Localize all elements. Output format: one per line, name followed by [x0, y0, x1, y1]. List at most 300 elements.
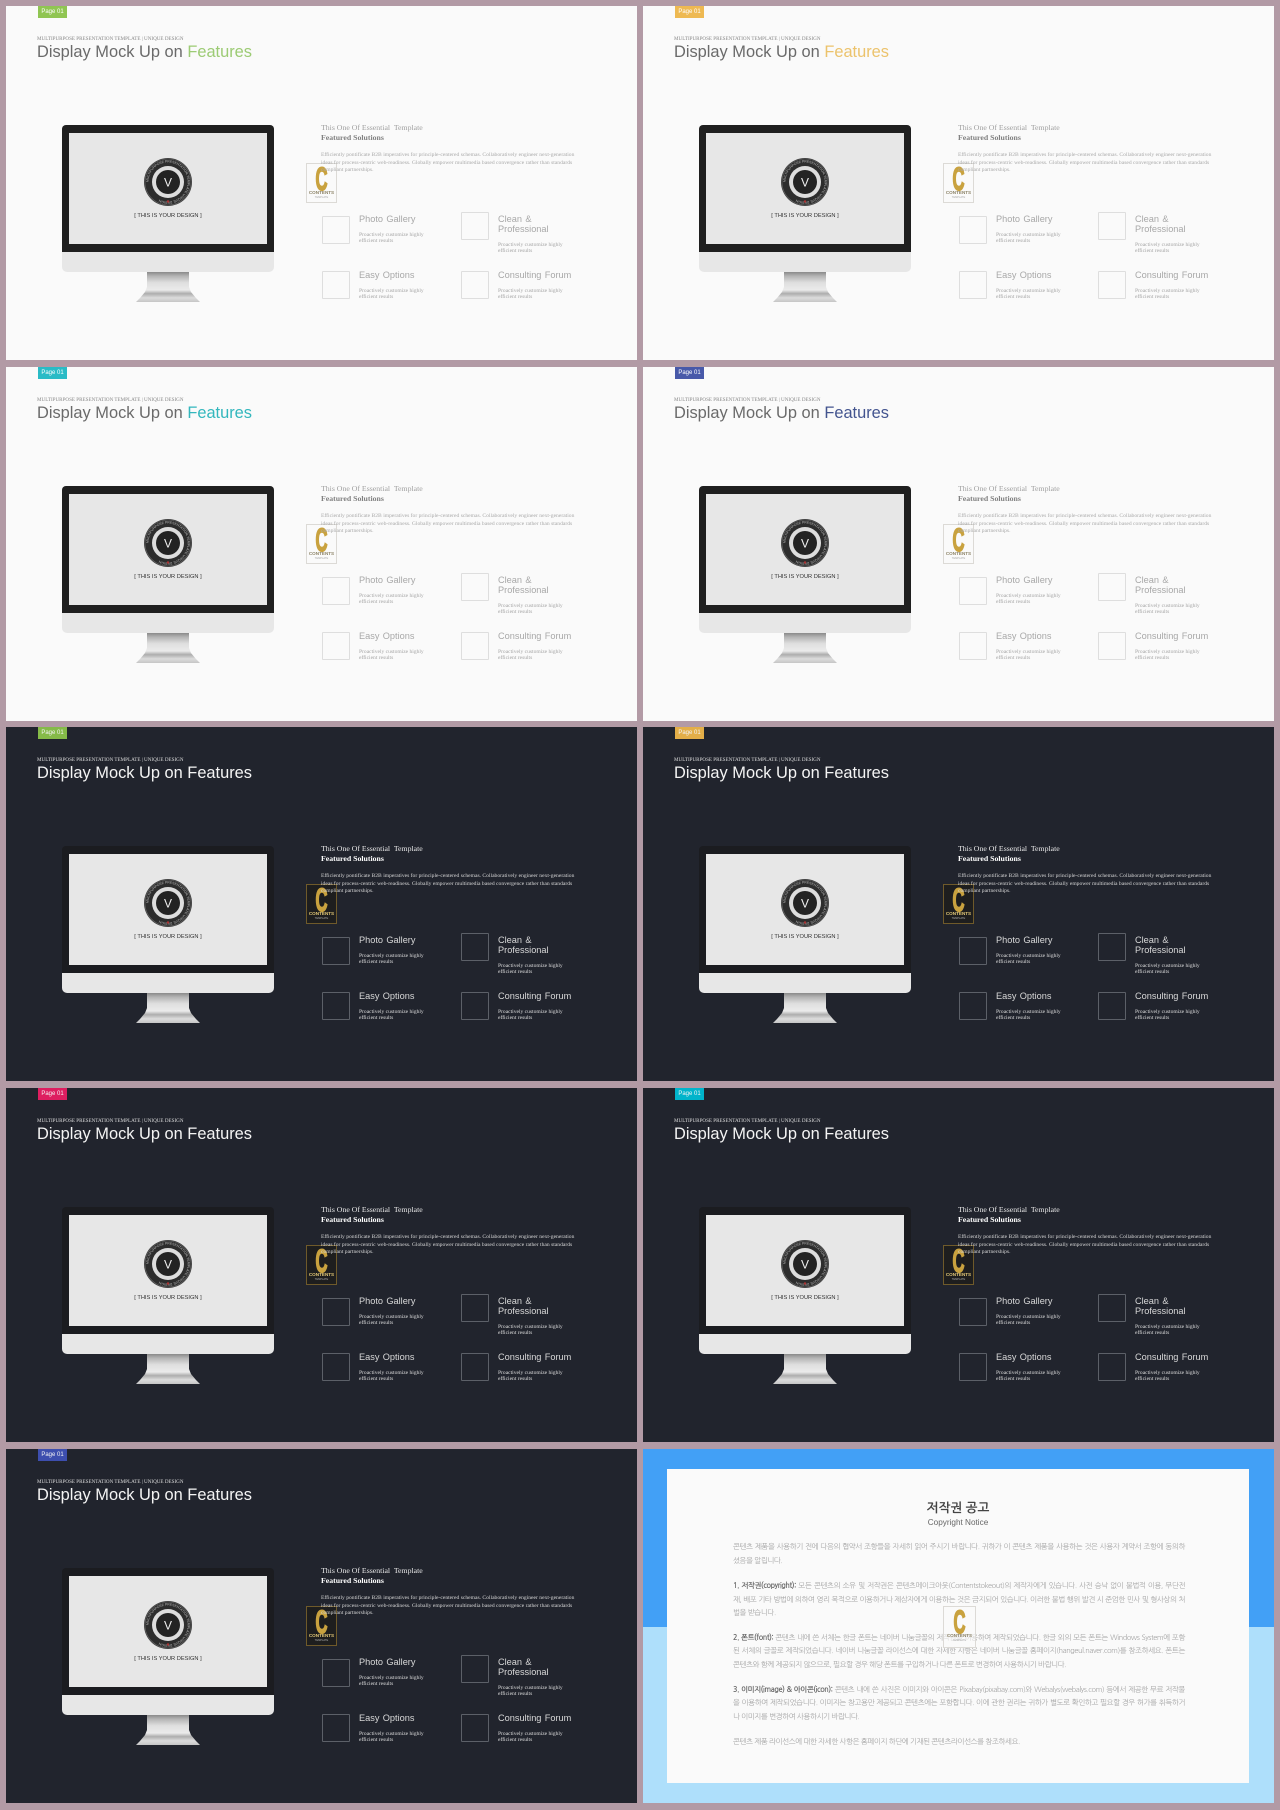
paragraph: ideas for process-centric web-readiness. Globally empower multimedia based convergence rather than standards [958, 521, 1209, 527]
watermark [306, 163, 337, 203]
intro paragraph: 셨음을 알립니다. [733, 1558, 782, 1564]
feature: photo gallery [959, 214, 1061, 244]
paragraph: Efficiently pontificate B2B imperatives for principle-centered schemas. Collaboratively engineer next-generation [321, 513, 574, 519]
paragraph: compliant partnerships. [958, 528, 1011, 534]
feature: photo gallery: Proactively customize highly [996, 1314, 1061, 1320]
paragraph: ideas for process-centric web-readiness. Globally empower multimedia based convergence rather than standards [321, 1603, 572, 1609]
feature: easy options: Easy Options [359, 1352, 414, 1362]
title: Display Mock Up on Features [37, 43, 252, 61]
feature: photo gallery: Proactively customize highly [996, 232, 1061, 238]
subtitle: MULTIPURPOSE PRESENTATION TEMPLATE | UNIQUE DESIGN [674, 757, 820, 763]
feature: easy options: Easy Options [996, 990, 1051, 1000]
paragraph: Efficiently pontificate B2B imperatives for principle-centered schemas. Collaboratively engineer next-generation [958, 513, 1211, 519]
feature: clean and professional: efficient results [1135, 969, 1169, 975]
paragraph [958, 513, 1212, 534]
feature: clean and professional: Clean & [1135, 934, 1168, 944]
heading: This One Of Essential Template [958, 1204, 1060, 1214]
feature: consulting forum: Proactively customize highly [498, 648, 563, 654]
title: Display Mock Up on Features [674, 404, 889, 422]
feature: photo gallery: Proactively customize highly [996, 592, 1061, 598]
feature: easy options: efficient results [996, 1376, 1030, 1382]
feature: consulting forum: Consulting Forum [498, 1352, 571, 1362]
heading: Featured Solutions [958, 1215, 1021, 1224]
feature: photo gallery: Photo Gallery [359, 574, 415, 584]
heading: This One Of Essential Template [321, 844, 423, 852]
feature: clean and professional: efficient results [1135, 1330, 1169, 1336]
feature: clean and professional: efficient results [498, 1330, 532, 1336]
intro paragraph: 콘텐츠 제품을 사용하기 전에 다음의 협약서 조항들을 자세히 읽어 주시기 바랍니다. 귀하가 이 콘텐츠 제품을 사용하는 것은 사용자 계약서 조항에 동의하 [733, 1544, 1185, 1551]
feature: consulting forum: Consulting Forum [498, 1712, 571, 1722]
feature: clean and professional: Proactively customize highly [498, 1324, 563, 1330]
feature: clean and professional [1098, 212, 1200, 254]
feature: consulting forum [461, 990, 571, 1021]
heading [321, 484, 423, 503]
badge logo: V [164, 896, 172, 910]
section 3: image and icon: 을 이용하여 제작되었습니다. 이미지는 참고용만 제공되고 콘텐츠에는 포함합니다. 이에 관한 권리는 귀하가 별도로 확인하고 필요할 경우 허가를 취득하거 [733, 1700, 1185, 1707]
feature: clean and professional [461, 573, 563, 615]
feature: easy options [322, 630, 424, 661]
paragraph: ideas for process-centric web-readiness. Globally empower multimedia based convergence rather than standards [321, 1242, 572, 1248]
monitor mockup [699, 1207, 911, 1384]
screen caption: [ THIS IS YOUR DESIGN ] [134, 934, 202, 940]
watermark: TEMPLATE [315, 196, 328, 199]
paragraph: compliant partnerships. [321, 167, 374, 173]
feature: photo gallery: Proactively customize highly [359, 592, 424, 598]
page tag [38, 1449, 67, 1461]
heading: This One Of Essential Template [321, 484, 423, 492]
feature: clean and professional: Proactively customize highly [1135, 1324, 1200, 1330]
feature: clean and professional: Professional [1135, 584, 1186, 594]
feature: consulting forum [461, 630, 571, 661]
feature: clean and professional: Professional [1135, 224, 1186, 234]
notice sheet [667, 1469, 1249, 1783]
monitor mockup [62, 1207, 274, 1384]
page tag: Page 01 [678, 730, 701, 736]
feature: clean and professional: Clean & [498, 214, 532, 224]
feature: consulting forum [1098, 270, 1208, 300]
feature: photo gallery: Proactively customize highly [359, 232, 424, 238]
feature: photo gallery [959, 1293, 1084, 1339]
paragraph: compliant partnerships. [958, 167, 1011, 173]
watermark: TEMPLATE [315, 917, 328, 920]
feature: clean and professional: Professional [1135, 1306, 1186, 1316]
feature: clean and professional: Proactively customize highly [1135, 962, 1200, 968]
feature: clean and professional [461, 933, 563, 975]
page tag: Page 01 [678, 1091, 701, 1097]
paragraph: ideas for process-centric web-readiness. Globally empower multimedia based convergence rather than standards [321, 160, 572, 166]
section 2: font: 된 서체의 글꼴로 제작되었습니다. 네이버 나눔글꼴 라이선스에 대한 자세한 사항은 네이버 나눔글꼴 홈페이지(hangeul.naver.com)를 참조하세요. 폰트는 [733, 1648, 1185, 1655]
feature: easy options: efficient results [359, 655, 393, 661]
feature: consulting forum: Proactively customize highly [1135, 1008, 1200, 1014]
badge logo: MULTIPURPOSE PRESENTATION TEMPLATE UNIQUE DESIGN [146, 160, 190, 204]
feature: clean and professional: Professional [498, 944, 549, 954]
feature: clean and professional: Professional [498, 1666, 549, 1676]
feature: clean and professional: efficient results [498, 969, 532, 975]
watermark: TEMPLATE [952, 557, 965, 560]
feature: clean and professional: efficient results [1135, 609, 1169, 615]
paragraph: compliant partnerships. [958, 888, 1011, 894]
feature: clean and professional [461, 1293, 586, 1345]
feature: clean and professional: Proactively customize highly [1135, 602, 1200, 608]
watermark: C [952, 522, 965, 558]
feature: photo gallery: efficient results [996, 599, 1030, 605]
feature: clean and professional: Professional [498, 224, 549, 234]
heading: Featured Solutions [321, 133, 384, 142]
page tag [38, 6, 67, 18]
section 1: copyright [733, 1580, 1185, 1620]
feature: easy options: Easy Options [996, 630, 1051, 640]
feature: easy options [959, 988, 1084, 1034]
watermark: CONTENTS [946, 190, 971, 195]
watermark: TEMPLATE [952, 196, 965, 199]
feature: easy options: Easy Options [996, 270, 1051, 280]
feature: consulting forum: Proactively customize highly [498, 1008, 563, 1014]
page tag [675, 6, 704, 18]
heading: This One Of Essential Template [321, 1566, 423, 1574]
monitor mockup [62, 1568, 274, 1745]
monitor mockup [699, 486, 911, 663]
feature: photo gallery [959, 932, 1084, 978]
section 3: image and icon [733, 1684, 1185, 1724]
feature: easy options [959, 270, 1061, 300]
watermark: C [315, 522, 328, 558]
paragraph [321, 1234, 574, 1257]
feature: consulting forum: Consulting Forum [498, 270, 571, 280]
watermark [306, 1606, 337, 1646]
badge logo: V [801, 896, 809, 910]
feature: consulting forum: Proactively customize highly [498, 1730, 563, 1736]
watermark: CONTENTS [946, 1272, 971, 1277]
feature: clean and professional: Proactively customize highly [498, 962, 563, 968]
watermark: CONTENTS [946, 551, 971, 556]
heading: Featured Solutions [321, 854, 384, 863]
feature: easy options: Proactively customize highly [359, 1370, 424, 1376]
feature: consulting forum: Consulting Forum [1135, 630, 1208, 640]
paragraph [321, 513, 574, 534]
watermark [943, 1245, 974, 1285]
feature: easy options: Proactively customize highly [359, 1730, 424, 1736]
paragraph: compliant partnerships. [321, 1610, 374, 1616]
subtitle: MULTIPURPOSE PRESENTATION TEMPLATE | UNIQUE DESIGN [37, 397, 184, 403]
section 1: copyright: 재, 배포 기타 방법에 의하여 영리 목적으로 이용하거나 제삼자에게 이용하는 것은 금지되어 있습니다. 이러한 불법 행위 발견 시 준엄한 민사 및 형사상의 처 [733, 1596, 1185, 1604]
heading [321, 844, 423, 863]
panel: slide 4 light indigo [643, 367, 1274, 721]
feature: clean and professional: Clean & [1135, 1296, 1168, 1306]
feature: easy options: Proactively customize highly [996, 288, 1061, 294]
feature: photo gallery: efficient results [359, 599, 393, 605]
screen caption: [ THIS IS YOUR DESIGN ] [134, 212, 202, 218]
section 1: copyright: 1. 저작권(copyright): 모든 콘텐츠의 소유 및 저작권은 콘텐츠메이크아웃(Contentstokeout)의 제작자에게 있습니다. 사전 승낙 없이 불법적 이용, 무단전 [733, 1583, 1185, 1590]
badge logo: MULTIPURPOSE PRESENTATION TEMPLATE UNIQUE DESIGN [146, 521, 190, 565]
monitor mockup [62, 846, 274, 1023]
title: Display Mock Up on Features [674, 43, 889, 61]
paragraph: ideas for process-centric web-readiness. Globally empower multimedia based convergence rather than standards [958, 1242, 1209, 1248]
feature: photo gallery: Photo Gallery [996, 574, 1052, 584]
feature: photo gallery: Proactively customize highly [359, 952, 424, 958]
panel: copyright notice [643, 1449, 1274, 1803]
paragraph: ideas for process-centric web-readiness. Globally empower multimedia based convergence rather than standards [958, 160, 1209, 166]
page tag: Page 01 [41, 1091, 64, 1097]
watermark [943, 1606, 976, 1648]
feature: photo gallery [322, 1293, 447, 1339]
feature: easy options: efficient results [359, 1737, 393, 1743]
screen caption: [ THIS IS YOUR DESIGN ] [134, 574, 202, 580]
feature: easy options: Easy Options [359, 630, 414, 640]
paragraph: Efficiently pontificate B2B imperatives for principle-centered schemas. Collaboratively engineer next-generation [958, 1234, 1211, 1240]
watermark: C [315, 161, 328, 197]
watermark: CONTENTS [309, 911, 334, 916]
page tag: Page 01 [678, 370, 701, 376]
section 3: image and icon: 3. 이미지(image) & 아이콘(icon): 콘텐츠 내에 쓴 사진은 이미지와 아이콘은 Pixabay(pixabay.com)와 Webalys(webalys.com) 등에서 제공한 무료 저작물 [733, 1686, 1185, 1694]
paragraph [958, 152, 1212, 173]
watermark: TEMPLATE [953, 1639, 966, 1642]
watermark: TEMPLATE [952, 917, 965, 920]
feature: photo gallery: Photo Gallery [996, 214, 1052, 224]
monitor mockup [699, 125, 911, 302]
feature: photo gallery: Photo Gallery [359, 934, 415, 944]
notice title: 저작권 공고 [927, 1501, 989, 1514]
feature: easy options [322, 270, 424, 300]
feature: consulting forum: efficient results [1135, 655, 1169, 661]
feature: clean and professional: Professional [498, 1306, 549, 1316]
subtitle: MULTIPURPOSE PRESENTATION TEMPLATE | UNIQUE DESIGN [37, 757, 184, 763]
watermark: C [315, 882, 328, 918]
watermark [943, 524, 974, 564]
feature: easy options [959, 630, 1061, 661]
subtitle: MULTIPURPOSE PRESENTATION TEMPLATE | UNIQUE DESIGN [674, 1118, 820, 1124]
badge logo: MULTIPURPOSE PRESENTATION TEMPLATE UNIQUE DESIGN [146, 1242, 190, 1286]
paragraph: Efficiently pontificate B2B imperatives for principle-centered schemas. Collaboratively engineer next-generation [321, 873, 574, 879]
heading: Featured Solutions [321, 494, 384, 503]
feature: photo gallery: Photo Gallery [996, 934, 1052, 944]
feature: consulting forum: Consulting Forum [498, 630, 571, 640]
feature: consulting forum: Consulting Forum [498, 990, 571, 1000]
paragraph [958, 1234, 1211, 1257]
feature: photo gallery [959, 574, 1061, 605]
badge logo: V [801, 176, 809, 190]
title: Display Mock Up on Features [37, 764, 252, 782]
feature: clean and professional: Clean & [1135, 574, 1168, 584]
subtitle: MULTIPURPOSE PRESENTATION TEMPLATE | UNIQUE DESIGN [674, 397, 820, 403]
panel: slide 7 dark pink [6, 1088, 637, 1442]
feature: photo gallery: efficient results [359, 959, 393, 965]
watermark: TEMPLATE [315, 1278, 328, 1281]
section 3: image and icon: 나 이미지를 변경하여 사용하시기 바랍니다. [733, 1714, 859, 1720]
badge logo: MULTIPURPOSE PRESENTATION TEMPLATE UNIQUE DESIGN [783, 160, 827, 204]
feature: clean and professional [1098, 932, 1223, 984]
feature: easy options: Easy Options [359, 270, 414, 280]
feature: clean and professional: Proactively customize highly [498, 242, 563, 248]
title: Display Mock Up on Features [37, 1486, 252, 1504]
heading [321, 1204, 423, 1226]
feature: consulting forum: Proactively customize highly [498, 288, 563, 294]
paragraph: compliant partnerships. [321, 888, 374, 894]
panel: slide 3 light teal [6, 367, 637, 721]
feature: clean and professional: efficient results [498, 248, 532, 254]
feature: clean and professional: Clean & [1135, 214, 1168, 224]
feature: clean and professional: efficient results [1135, 248, 1169, 254]
badge logo: V [801, 536, 809, 550]
heading: Featured Solutions [321, 1215, 384, 1224]
badge logo: V [801, 1258, 809, 1272]
feature: clean and professional: Professional [498, 584, 549, 594]
panel: slide 8 dark cyan [643, 1088, 1274, 1442]
feature: photo gallery: Proactively customize highly [359, 1314, 424, 1320]
page tag: Page 01 [41, 1452, 64, 1458]
feature: consulting forum: Proactively customize highly [1135, 648, 1200, 654]
heading [958, 122, 1060, 142]
screen caption: [ THIS IS YOUR DESIGN ] [771, 574, 839, 580]
heading [958, 484, 1060, 503]
feature: consulting forum: Proactively customize highly [1135, 1370, 1200, 1376]
paragraph: Efficiently pontificate B2B imperatives for principle-centered schemas. Collaboratively engineer next-generation [321, 1234, 574, 1240]
page tag [675, 367, 704, 379]
watermark [306, 884, 337, 924]
watermark: CONTENTS [309, 1272, 334, 1277]
watermark [943, 163, 974, 203]
watermark [306, 524, 337, 564]
title: Display Mock Up on Features [37, 404, 252, 422]
feature: clean and professional [1098, 1293, 1223, 1345]
monitor mockup [699, 846, 911, 1023]
monitor mockup [62, 125, 274, 302]
feature: photo gallery: efficient results [996, 238, 1030, 244]
feature: photo gallery: Proactively customize highly [359, 1674, 424, 1680]
section 2: font [733, 1632, 1185, 1672]
heading: This One Of Essential Template [321, 1204, 423, 1214]
badge logo: MULTIPURPOSE PRESENTATION TEMPLATE UNIQUE DESIGN [146, 1603, 190, 1647]
paragraph: Efficiently pontificate B2B imperatives for principle-centered schemas. Collaboratively engineer next-generation [321, 152, 574, 158]
watermark: TEMPLATE [952, 1278, 965, 1281]
feature: consulting forum [1098, 1349, 1223, 1395]
section 1: copyright: 벌을 받습니다. [733, 1610, 776, 1617]
feature: photo gallery [322, 574, 424, 605]
heading [958, 844, 1060, 865]
feature: photo gallery [322, 1654, 447, 1700]
heading: Featured Solutions [958, 854, 1021, 863]
subtitle: MULTIPURPOSE PRESENTATION TEMPLATE | UNIQUE DESIGN [674, 36, 820, 42]
monitor mockup [62, 486, 274, 663]
feature: easy options [322, 990, 424, 1021]
badge logo: MULTIPURPOSE PRESENTATION TEMPLATE UNIQUE DESIGN [783, 1242, 827, 1286]
paragraph [958, 873, 1211, 896]
paragraph [321, 873, 574, 894]
feature: easy options: efficient results [359, 294, 393, 300]
screen caption: [ THIS IS YOUR DESIGN ] [771, 934, 839, 940]
feature: easy options: Proactively customize highly [996, 648, 1061, 654]
panel: slide 2 light yellow [643, 6, 1274, 360]
watermark: CONTENTS [309, 1633, 334, 1638]
feature: clean and professional: Clean & [498, 574, 532, 584]
heading: This One Of Essential Template [958, 484, 1060, 492]
watermark: CONTENTS [946, 911, 971, 916]
feature: consulting forum: Consulting Forum [1135, 1352, 1208, 1362]
feature: easy options [322, 1710, 447, 1756]
feature: clean and professional: Proactively customize highly [498, 602, 563, 608]
feature: clean and professional: Professional [1135, 944, 1186, 954]
paragraph: compliant partnerships. [321, 1249, 374, 1255]
feature: clean and professional: Proactively customize highly [498, 1684, 563, 1690]
feature: consulting forum: Consulting Forum [1135, 270, 1208, 280]
feature: easy options: efficient results [359, 1015, 393, 1021]
section 2: font: 2. 폰트(font): 콘텐츠 내에 쓴 서체는 한글 폰트는 네이버 나눔글꼴의 저작권을 허용하여 제작되었습니다. 한글 외의 모든 폰트는 Windows System에 포함 [733, 1634, 1185, 1642]
page tag: Page 01 [41, 730, 64, 736]
screen caption: [ THIS IS YOUR DESIGN ] [134, 1294, 202, 1300]
feature: easy options: efficient results [359, 1376, 393, 1382]
heading: Featured Solutions [958, 133, 1021, 142]
feature: consulting forum [461, 1349, 586, 1395]
watermark: C [315, 1243, 328, 1279]
paragraph: compliant partnerships. [958, 1249, 1011, 1255]
panel: slide 9 dark indigo [6, 1449, 637, 1803]
watermark: C [315, 1604, 328, 1640]
feature: consulting forum [1098, 988, 1223, 1034]
feature: photo gallery: Photo Gallery [359, 1296, 415, 1306]
feature: clean and professional: Proactively customize highly [1135, 242, 1200, 248]
subtitle: MULTIPURPOSE PRESENTATION TEMPLATE | UNIQUE DESIGN [37, 1479, 184, 1485]
feature: consulting forum: Proactively customize highly [498, 1370, 563, 1376]
heading: This One Of Essential Template [958, 844, 1060, 852]
panel: slide 5 dark green [6, 727, 637, 1081]
badge logo: MULTIPURPOSE PRESENTATION TEMPLATE UNIQUE DESIGN [783, 881, 827, 925]
paragraph: compliant partnerships. [321, 528, 374, 534]
heading [321, 1566, 423, 1587]
closing line: 콘텐츠 제품 라이선스에 대한 자세한 사항은 홈페이지 하단에 기재된 콘텐츠라이선스를 참조하세요. [733, 1739, 1020, 1746]
intro paragraph [733, 1541, 1185, 1568]
feature: consulting forum [461, 1710, 586, 1756]
watermark: C [952, 882, 965, 918]
page tag: Page 01 [678, 9, 701, 15]
section 2: font: 콘텐츠와 함께 제공되지 않으므로, 필요할 경우 해당 폰트를 구입하거나 다른 폰트로 변경하여 사용하시기 바랍니다. [733, 1662, 1066, 1668]
feature: consulting forum: Consulting Forum [1135, 990, 1208, 1000]
feature: easy options: efficient results [996, 1015, 1030, 1021]
screen caption: [ THIS IS YOUR DESIGN ] [771, 1294, 839, 1300]
feature: clean and professional [1098, 573, 1200, 615]
page tag [38, 1088, 67, 1100]
paragraph: Efficiently pontificate B2B imperatives for principle-centered schemas. Collaboratively engineer next-generation [321, 1595, 574, 1601]
feature: photo gallery: Photo Gallery [996, 1296, 1052, 1306]
heading: Featured Solutions [958, 494, 1021, 503]
panel: slide 6 dark yellow [643, 727, 1274, 1081]
notice subtitle: Copyright Notice [928, 1518, 988, 1526]
heading [321, 122, 423, 142]
watermark: C [953, 1604, 966, 1640]
feature: easy options: Proactively customize highly [996, 1008, 1061, 1014]
watermark: CONTENTS [309, 551, 334, 556]
badge logo: V [164, 536, 172, 550]
paragraph [321, 1595, 574, 1618]
page tag [38, 367, 67, 379]
feature: easy options: Proactively customize highly [359, 648, 424, 654]
feature: easy options: Easy Options [996, 1352, 1051, 1362]
feature: clean and professional: Clean & [498, 1656, 532, 1666]
badge logo: MULTIPURPOSE PRESENTATION TEMPLATE UNIQUE DESIGN [146, 881, 190, 925]
feature: clean and professional: efficient results [498, 1691, 532, 1697]
feature: consulting forum: efficient results [1135, 1015, 1169, 1021]
feature: consulting forum [1098, 630, 1208, 661]
page tag [675, 1088, 704, 1100]
watermark: CONTENTS [947, 1633, 972, 1638]
page tag: Page 01 [41, 370, 64, 376]
feature: consulting forum [461, 270, 571, 300]
feature: photo gallery: Photo Gallery [359, 214, 415, 224]
feature: consulting forum: efficient results [498, 1737, 532, 1743]
page tag [675, 727, 704, 739]
feature: easy options [322, 1349, 447, 1395]
title: Display Mock Up on Features [674, 764, 889, 782]
subtitle: MULTIPURPOSE PRESENTATION TEMPLATE | UNIQUE DESIGN [37, 36, 184, 42]
screen caption: [ THIS IS YOUR DESIGN ] [134, 1656, 202, 1662]
